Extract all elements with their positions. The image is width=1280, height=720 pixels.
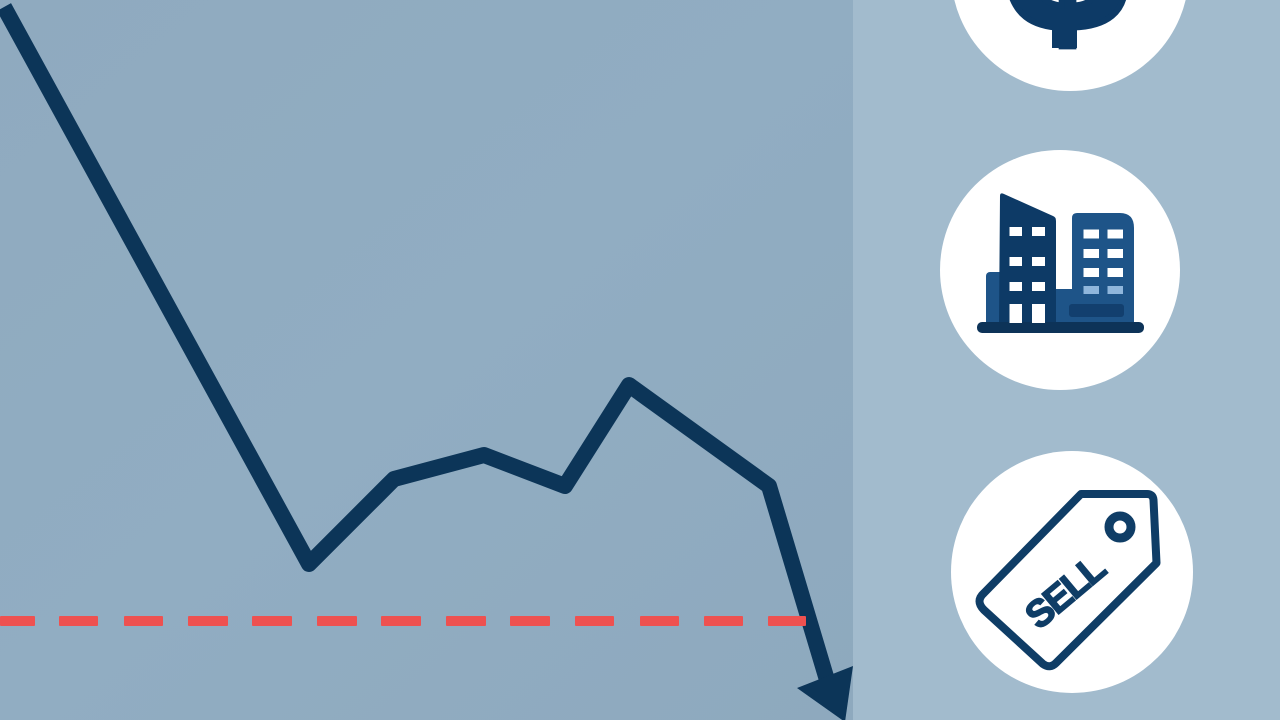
dollar stem foot <box>1052 24 1077 48</box>
ground base <box>977 322 1144 333</box>
panel: chart background <box>0 0 853 720</box>
icon: SELL price tag in circle: SELL <box>1018 547 1114 638</box>
icon: SELL price tag in circle <box>951 451 1193 693</box>
panel: icon column background <box>853 0 1280 720</box>
icon: office buildings in circle <box>940 150 1180 390</box>
dark sign <box>1069 304 1124 317</box>
left tower windows <box>1010 227 1045 323</box>
annex block <box>986 272 1000 324</box>
icon: dollar sign in circle <box>951 0 1189 91</box>
threshold line: red dashed <box>0 616 806 626</box>
left tower <box>999 193 1056 324</box>
middle block <box>1055 289 1073 324</box>
right tower windows <box>1084 230 1123 294</box>
right tower <box>1072 213 1134 324</box>
arrow: declining price line <box>4 7 853 720</box>
